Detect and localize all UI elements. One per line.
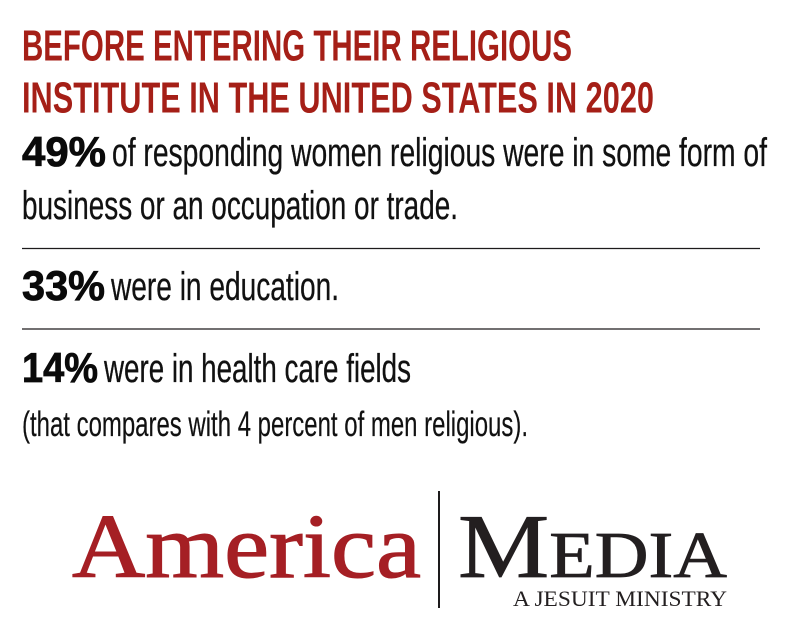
statistic: 49 percent business: 49%	[22, 128, 106, 175]
logo word: America: America	[72, 496, 421, 597]
statistic: 33 percent education: 33%	[22, 262, 105, 309]
statistic: 49 percent business: business or an occupation or trade.	[22, 184, 458, 228]
logo: America Media	[72, 491, 727, 611]
statistic: 14 percent health care: 14%	[22, 344, 98, 391]
logo word: Media: MEDIA	[458, 496, 727, 597]
statistic: 14 percent health care	[22, 344, 528, 444]
logo tagline: A JESUIT MINISTRY	[513, 586, 727, 611]
statistic: 33 percent education	[22, 262, 339, 309]
statistic: 14 percent health care: (that compares with 4 percent of men religious).	[22, 405, 528, 444]
statistic: 49 percent business	[22, 128, 768, 228]
statistic: 33 percent education: were in education.	[110, 265, 339, 309]
title	[22, 22, 654, 122]
statistic: 14 percent health care: were in health care fields	[103, 347, 411, 391]
